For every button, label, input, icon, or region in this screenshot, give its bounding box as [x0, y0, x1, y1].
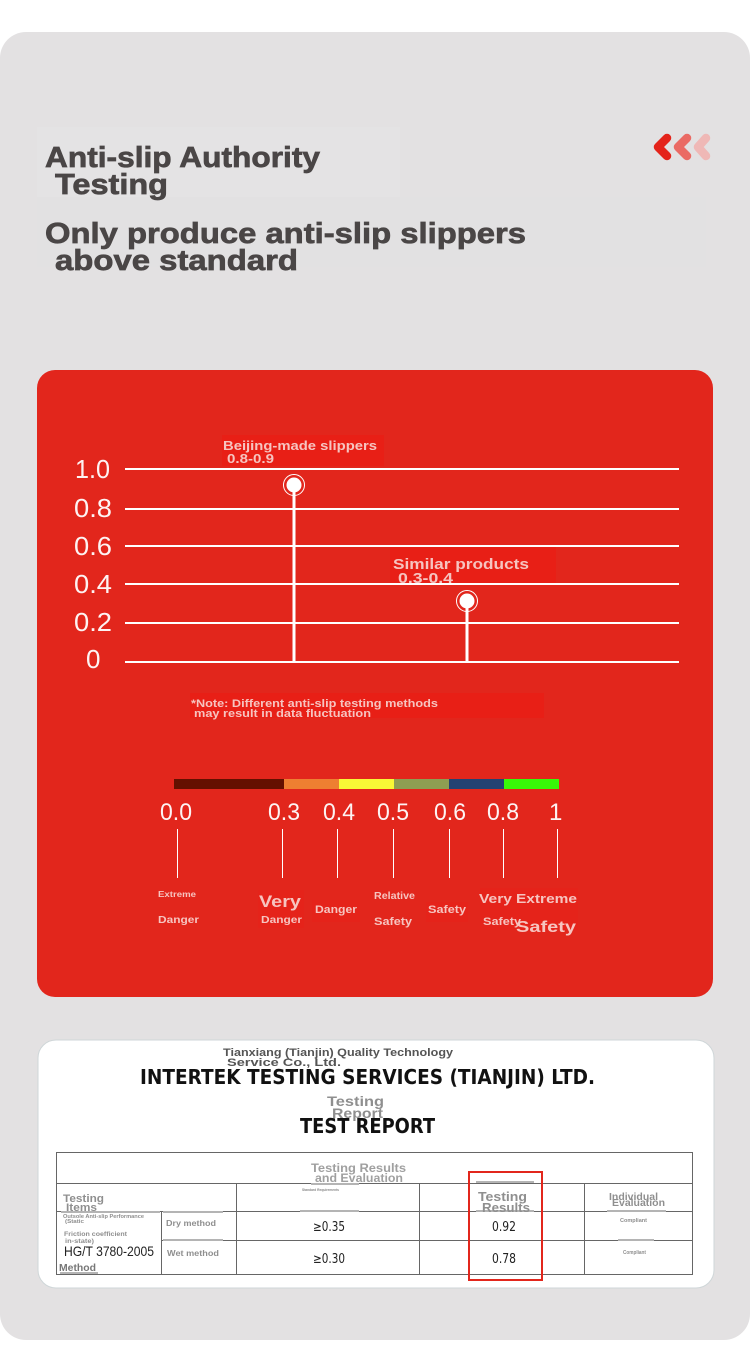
scale label: Very Danger: Very	[259, 892, 302, 911]
subheading: above standard	[55, 245, 298, 277]
icon: triple chevrons	[658, 138, 706, 156]
evaluation values: Compliant	[620, 1218, 647, 1224]
marker: Beijing-made slippers	[284, 474, 304, 662]
table header: Testing Results and Evaluation	[311, 1163, 406, 1185]
scale values: 0.4	[323, 799, 355, 826]
report title: TEST REPORT	[300, 1114, 435, 1138]
scale label: Very Safety: Safety	[483, 916, 522, 928]
scale label: Relative Safety	[374, 891, 415, 928]
heading: Testing	[55, 169, 168, 201]
scale label: Safety: Safety	[428, 904, 467, 916]
row label: outsole performance: in-state)	[65, 1239, 94, 1245]
y axis labels: 0.6	[74, 531, 112, 561]
evaluation values: Compliant	[623, 1250, 646, 1256]
scale label: Danger: Danger	[315, 904, 358, 916]
scale label: Extreme Danger	[158, 890, 199, 926]
scale values: 0.8	[487, 799, 519, 826]
standard values	[313, 1220, 345, 1267]
scale label: Very Safety	[479, 891, 522, 928]
table header: Testing Results: Testing	[478, 1189, 527, 1204]
table header: Testing Results	[478, 1189, 530, 1215]
scale values: 0.3	[268, 799, 300, 826]
table header: Individual Evaluation	[609, 1191, 665, 1209]
table header: Testing Results: Results	[482, 1200, 530, 1215]
table header: Individual Evaluation: Individual	[609, 1191, 658, 1203]
standard values: ≥0.35	[313, 1220, 345, 1235]
marker: Similar products	[456, 590, 478, 662]
label: Beijing-made slippers	[223, 438, 377, 466]
scale label: Very Danger: Danger	[261, 915, 302, 926]
label: Similar products	[393, 556, 529, 587]
table header: Testing Items: Testing	[63, 1193, 104, 1205]
scale values: 0.6	[434, 799, 466, 826]
scale label: Extreme Safety: Extreme	[516, 891, 577, 906]
report issuer: Tianxiang (Tianjin) Quality Technology	[223, 1047, 454, 1059]
row label: outsole performance: Outsole Anti-slip Performance	[63, 1214, 144, 1220]
heading	[45, 142, 320, 201]
row label: outsole performance: (Static	[65, 1219, 84, 1225]
table header: Individual Evaluation: Evaluation	[612, 1197, 665, 1209]
color scale bar	[174, 779, 559, 789]
standard values: ≥0.30	[313, 1252, 345, 1267]
method: dry: Dry method	[166, 1219, 216, 1228]
report title: Report	[332, 1105, 383, 1121]
scale values: 0.0	[160, 799, 192, 826]
table header: Standard Requirements: Standard Requirements	[302, 1188, 339, 1192]
scale label: Extreme Danger: Extreme	[158, 890, 197, 899]
result values: 0.78	[492, 1252, 516, 1267]
report title	[300, 1093, 435, 1138]
note: *Note: Different anti-slip testing methods	[191, 698, 438, 710]
row label: outsole performance	[63, 1214, 144, 1245]
report title: Testing	[327, 1093, 384, 1109]
scale label: Extreme Danger: Danger	[158, 915, 199, 926]
note: may result in data fluctuation	[194, 708, 371, 720]
scale values: 1	[549, 799, 562, 826]
results table	[56, 1152, 692, 1274]
highlight box	[469, 1172, 542, 1280]
scale label: Extreme Safety	[516, 891, 577, 936]
y axis labels: 0.2	[74, 607, 112, 637]
row label: method: Method	[59, 1263, 96, 1274]
scale label: Very Danger	[259, 892, 302, 926]
y axis labels	[74, 454, 112, 674]
table header: Testing Items	[63, 1193, 104, 1214]
line chart gridlines	[125, 469, 679, 662]
table header: Testing Results and Evaluation: Testing Results	[311, 1163, 406, 1175]
scale label: Very Safety: Very	[479, 891, 513, 906]
note	[191, 698, 438, 720]
scale tick lines	[178, 829, 558, 878]
y axis labels: 0.8	[74, 493, 112, 523]
label background patches	[190, 435, 578, 930]
scale label: Relative Safety: Safety	[374, 916, 413, 928]
panel: test report	[38, 1040, 714, 1288]
table header: Testing Items: Items	[66, 1202, 97, 1214]
label: Beijing-made slippers: 0.8-0.9	[227, 451, 274, 466]
scale values: 0.5	[377, 799, 409, 826]
row label: outsole performance: Friction coefficient	[64, 1232, 127, 1238]
label: Similar products: 0.3-0.4	[398, 570, 454, 587]
evaluation values	[620, 1218, 647, 1256]
table header: Testing Results and Evaluation: and Evaluation	[315, 1173, 403, 1185]
scale label: Extreme Safety: Safety	[516, 919, 576, 936]
label: Similar products: Similar products	[393, 556, 529, 573]
subheading: Only produce anti-slip slippers	[45, 218, 526, 250]
subheading	[45, 218, 526, 277]
panel: red anti-slip chart	[37, 370, 713, 997]
row label: standard code: HG/T 3780-2005	[64, 1243, 154, 1259]
report issuer: Service Co., Ltd.	[227, 1057, 341, 1069]
report issuer	[140, 1047, 595, 1089]
scale label: Relative Safety: Relative	[374, 891, 415, 902]
method: wet: Wet method	[167, 1249, 219, 1258]
scale values	[160, 799, 562, 826]
y axis labels: 0.4	[74, 569, 112, 599]
result values	[492, 1220, 516, 1267]
y axis labels: 0	[86, 644, 100, 674]
heading: Anti-slip Authority	[45, 142, 320, 174]
result values: 0.92	[492, 1220, 516, 1235]
report issuer: INTERTEK TESTING SERVICES (TIANJIN) LTD.	[140, 1065, 595, 1089]
table text smudges	[60, 1182, 666, 1273]
y axis labels: 1.0	[75, 454, 110, 484]
label: Beijing-made slippers: Beijing-made slippers	[223, 438, 377, 453]
